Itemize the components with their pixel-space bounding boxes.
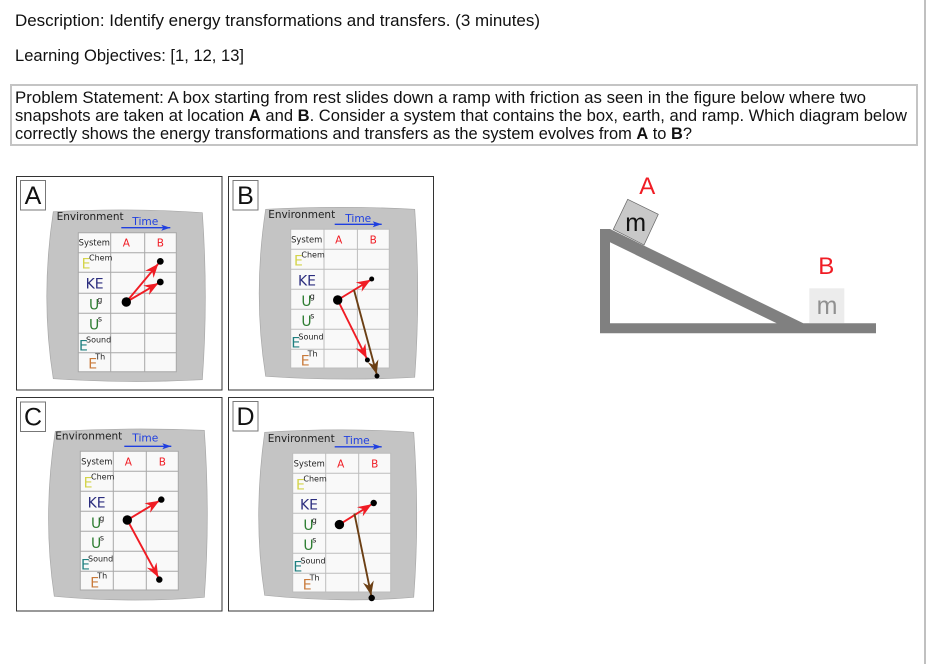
panel: option D: System	[294, 458, 325, 468]
panel: option B: Chem	[301, 250, 325, 259]
panel: option C: B	[159, 456, 166, 468]
panel: option A: U	[89, 297, 99, 313]
panel: option C: U	[91, 536, 101, 552]
panel: option B: B	[370, 234, 377, 246]
panel: option A: A	[25, 182, 42, 210]
panel: option C: Environment	[55, 429, 123, 442]
panel: option A: U	[89, 317, 99, 333]
panel: option D: KE	[300, 497, 318, 513]
panel: problem statement: Problem Statement: A box starting from rest slides down a ramp with friction as seen in the figure below where two	[15, 89, 866, 107]
panel: option D: Sound	[300, 556, 326, 565]
panel: option D	[228, 398, 434, 611]
panel: option D: E	[293, 559, 302, 575]
panel: option A: g	[97, 295, 102, 304]
panel: option B: E	[294, 253, 303, 269]
panel: option C: System	[81, 456, 112, 466]
panel: option B: Th	[307, 349, 318, 358]
panel: option A: s	[98, 315, 102, 324]
panel: option C: A	[125, 456, 133, 468]
panel: problem statement: snapshots are taken at location A and B. Consider a system that contains the box, earth, and ramp. Which diagram below	[15, 107, 907, 125]
panel: option A	[16, 176, 222, 390]
panel: option C: Time	[131, 431, 159, 444]
panel: option C: Chem	[91, 472, 115, 481]
panel: option B: B	[237, 182, 254, 210]
panel: option D: E	[303, 577, 312, 593]
panel: option C: E	[84, 475, 92, 491]
panel: option B: g	[310, 292, 315, 301]
panel: option C: s	[100, 533, 104, 542]
panel: option B: Sound	[298, 332, 324, 341]
panel: option A: B	[157, 238, 164, 250]
panel: option D: A	[337, 458, 345, 470]
panel: option D: Chem	[303, 474, 327, 483]
panel: option B: U	[301, 294, 312, 310]
panel: option A: A	[123, 238, 131, 250]
ramp figure: m	[817, 292, 837, 320]
panel: option A: E	[79, 339, 88, 355]
panel: option D: g	[312, 516, 317, 525]
panel: option A: Environment	[57, 210, 124, 223]
ramp figure	[600, 173, 876, 333]
ramp figure: A	[639, 173, 655, 200]
description text: Description: Identify energy transformations and transfers. (3 minutes)	[15, 12, 540, 30]
panel: option A: Th	[94, 353, 105, 362]
panel: option D: Time	[343, 434, 370, 447]
panel: option A: E	[82, 257, 90, 273]
panel: option B: System	[291, 234, 322, 244]
panel: option A: E	[88, 357, 97, 373]
panel: option C: Th	[96, 571, 107, 580]
panel: option D: Environment	[268, 432, 335, 445]
panel: option C: U	[91, 516, 101, 532]
panel: problem statement: correctly shows the energy transformations and transfers as the system evolves from A to B?	[15, 125, 692, 143]
panel: option C: E	[90, 575, 99, 591]
panel: option C: C	[24, 404, 42, 432]
panel: option B: E	[291, 335, 300, 351]
panel: option D: U	[303, 518, 314, 534]
panel: option B: KE	[298, 273, 316, 289]
panel: option A: KE	[86, 277, 104, 293]
panel: option B: Time	[344, 212, 371, 225]
panel: option C	[16, 398, 222, 611]
panel: option A: Time	[131, 215, 159, 228]
panel: option A: Sound	[86, 336, 111, 345]
ramp figure: B	[818, 253, 834, 280]
panel: option B: A	[335, 234, 343, 246]
panel: option B: E	[301, 353, 310, 369]
panel: option D: D	[236, 403, 255, 431]
panel: option C: E	[81, 557, 90, 573]
learning objectives text: Learning Objectives: [1, 12, 13]	[15, 47, 244, 65]
page edge line	[924, 0, 926, 664]
panel: option B: Environment	[268, 208, 336, 221]
panel: option C: g	[99, 514, 104, 523]
panel: option B: s	[310, 311, 314, 320]
ramp figure: m	[625, 209, 646, 237]
panel: problem statement	[11, 85, 917, 145]
panel: option D: s	[312, 535, 316, 544]
panel: option A: Chem	[89, 254, 113, 263]
panel: option C: KE	[88, 495, 106, 511]
panel: option D: B	[371, 458, 378, 470]
panel: option B: U	[301, 314, 312, 330]
panel: option D: U	[303, 538, 314, 554]
panel: option A: System	[79, 238, 110, 248]
panel: option C: Sound	[88, 554, 113, 563]
panel: option D: Th	[309, 573, 320, 582]
panel: option D: E	[296, 477, 305, 493]
panel: option B	[228, 176, 434, 390]
